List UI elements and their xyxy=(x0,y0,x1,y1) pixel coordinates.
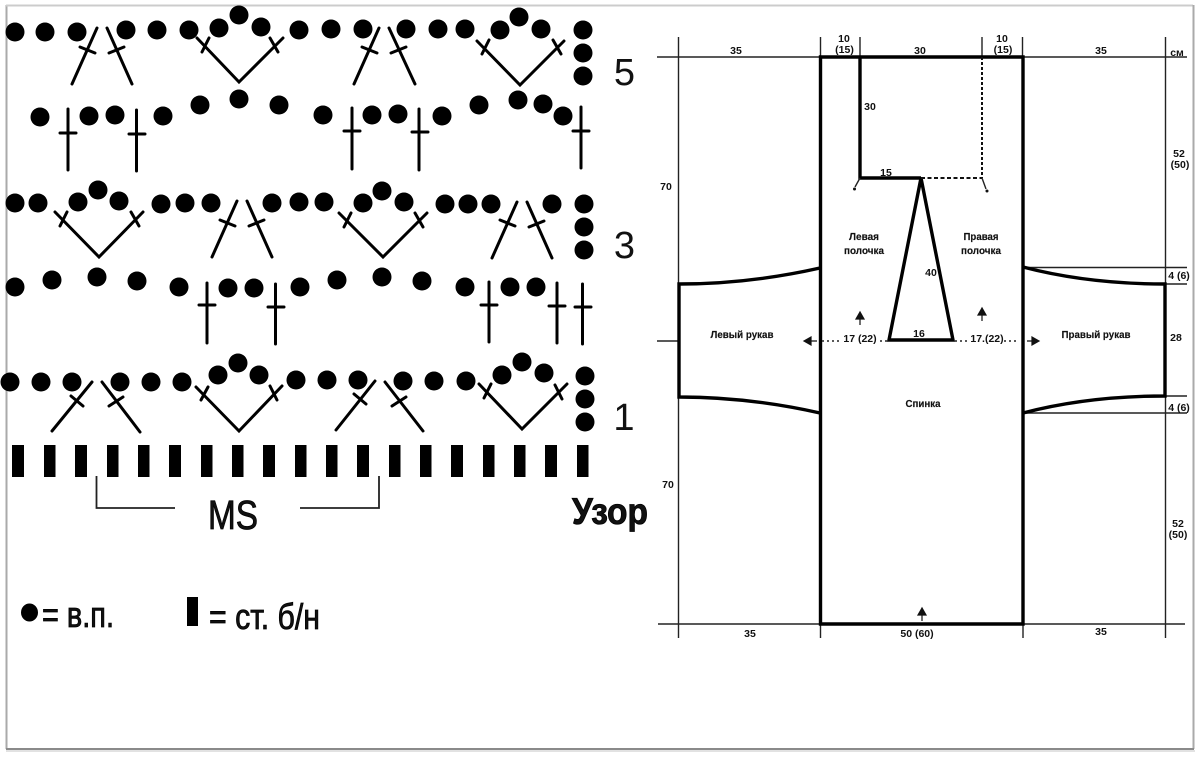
MS repeat bracket: MS xyxy=(208,492,258,538)
chart row 5 xyxy=(6,6,592,86)
row number 1: 1 xyxy=(613,397,635,439)
chart row 2 xyxy=(6,268,591,344)
dimension labels: 16 xyxy=(913,328,925,340)
dimension labels: 15 xyxy=(880,167,892,179)
body outline xyxy=(820,57,1023,624)
dimension labels: 35 xyxy=(744,628,756,640)
dimension labels: 10 xyxy=(838,33,850,45)
MS repeat bracket xyxy=(96,476,379,538)
piece labels xyxy=(710,231,1131,410)
piece labels: Правый рукав xyxy=(1062,329,1131,341)
legend: double crochet: = ст. б/н xyxy=(209,596,320,637)
dimension labels: 28 xyxy=(1170,332,1182,344)
foundation row bars xyxy=(12,445,588,477)
dimension labels: 50 (60) xyxy=(900,628,934,640)
legend: chain stitch: = в.п. xyxy=(42,594,114,635)
piece labels: Правая xyxy=(964,231,998,243)
dimension labels: 30 xyxy=(914,45,926,57)
dimension labels: (50) xyxy=(1171,159,1189,171)
dimension labels: 52 xyxy=(1173,148,1185,160)
dimension labels: (15) xyxy=(994,44,1012,56)
chart row 1 xyxy=(0,352,594,432)
chart row 3 xyxy=(6,180,594,260)
dimension labels: (15) xyxy=(835,44,854,56)
dimension labels: 4 (6) xyxy=(1168,402,1190,414)
dimension labels: 70 xyxy=(660,181,672,193)
measurement grid lines xyxy=(657,37,1187,638)
dimension labels: 4 (6) xyxy=(1168,270,1190,282)
dimension labels: 30 xyxy=(864,101,876,113)
dimension labels: 35 xyxy=(1095,45,1107,57)
legend: chain stitch xyxy=(21,594,114,635)
dimension labels: см xyxy=(1170,47,1184,59)
dimension labels xyxy=(660,33,1190,640)
dimension labels: 35 xyxy=(1095,626,1107,638)
dimension labels: 35 xyxy=(730,45,742,57)
panel: crochet stitch chart xyxy=(0,6,648,538)
dimension labels: 70 xyxy=(662,479,674,491)
pattern title: Узор xyxy=(572,491,648,532)
piece labels: Левый рукав xyxy=(710,329,774,341)
dimension labels: 52 xyxy=(1172,518,1184,530)
piece labels: полочка xyxy=(844,245,884,257)
dimension labels: 10 xyxy=(996,33,1008,45)
row number 5: 5 xyxy=(614,52,635,94)
piece labels: Левая xyxy=(849,231,879,243)
chart row 4 xyxy=(30,90,589,171)
row number 3: 3 xyxy=(614,225,635,267)
dimension labels: 17 (22) xyxy=(843,333,877,345)
dimension labels: 17.(22) xyxy=(970,333,1004,345)
left sleeve xyxy=(679,268,820,413)
piece labels: Спинка xyxy=(906,398,941,410)
dimension labels: 40 xyxy=(925,267,937,279)
dotted width guides with arrows xyxy=(804,308,1039,621)
piece labels: полочка xyxy=(961,245,1001,257)
right sleeve xyxy=(1023,267,1165,413)
panel: garment schematic xyxy=(657,33,1190,640)
dimension labels: (50) xyxy=(1169,529,1187,541)
